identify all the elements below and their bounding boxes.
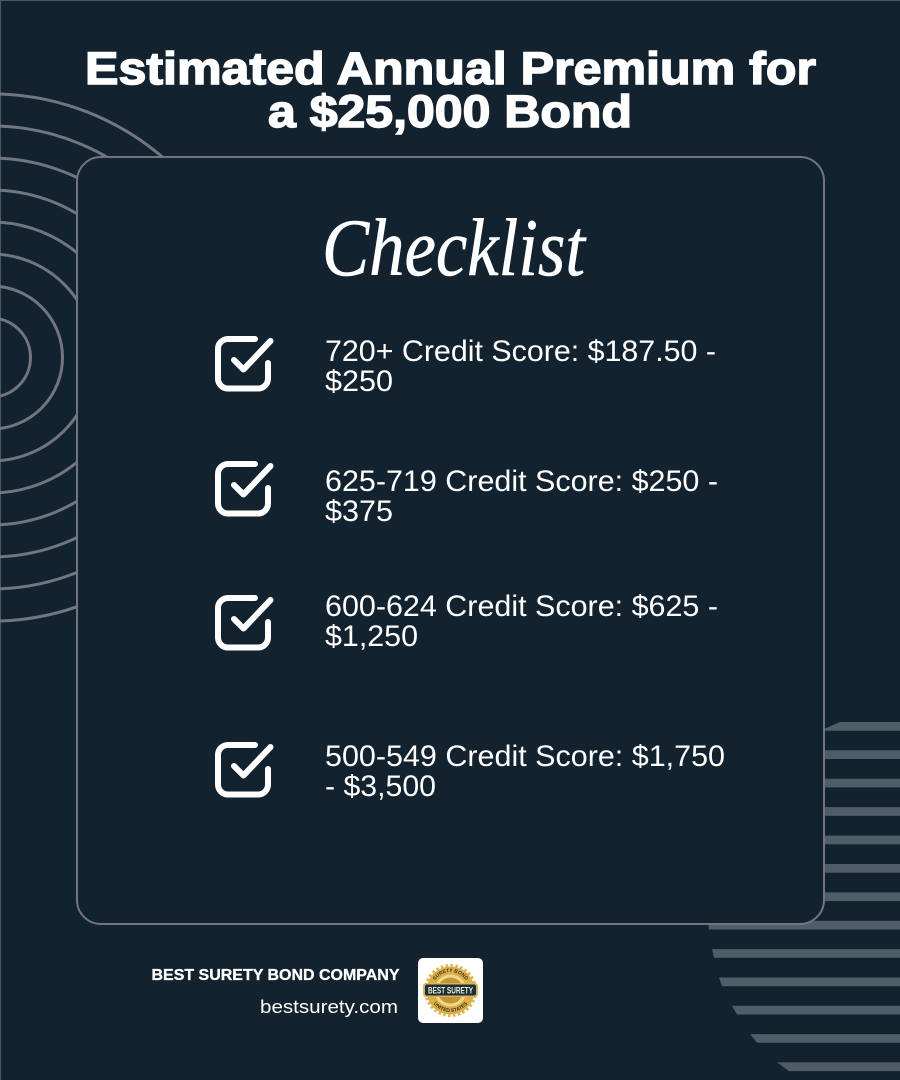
panel background	[77, 157, 824, 924]
item: 600-624 credit score	[218, 590, 718, 653]
item text: - $3,500	[325, 770, 436, 803]
gold seal	[425, 964, 476, 1017]
item text: $250	[325, 365, 393, 398]
item: 500-549 credit score	[218, 740, 725, 803]
item text	[325, 740, 725, 803]
icon: checkbox	[218, 745, 270, 794]
decorative striped circle	[708, 722, 900, 1071]
icon: checkbox	[218, 464, 270, 514]
item text	[325, 335, 716, 398]
panel: checklist	[77, 157, 824, 924]
logo badge	[418, 958, 483, 1023]
decorative concentric rings	[0, 94, 255, 621]
title: a $25,000 Bond	[268, 86, 632, 137]
heading: Checklist: Checklist	[322, 202, 587, 293]
footer: company name: BEST SURETY BOND COMPANY	[152, 967, 400, 984]
item text: 600-624 Credit Score: $625 -	[325, 590, 718, 623]
icon: checkbox	[218, 339, 270, 388]
item: 625-719 credit score	[218, 464, 718, 528]
item text: $1,250	[325, 620, 418, 653]
title: Estimated Annual Premium for	[85, 43, 816, 94]
item: 720+ credit score	[218, 335, 716, 398]
item text: 720+ Credit Score: $187.50 -	[325, 335, 716, 368]
gold seal: SURETY BOND	[432, 968, 468, 980]
item text: 500-549 Credit Score: $1,750	[325, 740, 725, 773]
footer: website: bestsurety.com	[260, 997, 398, 1017]
gold seal: UNITED STATES	[434, 1002, 468, 1012]
item text	[325, 590, 718, 653]
item text: $375	[325, 495, 393, 528]
icon: checkbox	[218, 598, 270, 648]
seal banner: BEST SURETY	[428, 986, 473, 996]
title	[85, 43, 816, 137]
item text	[325, 465, 718, 528]
item text: 625-719 Credit Score: $250 -	[325, 465, 718, 498]
